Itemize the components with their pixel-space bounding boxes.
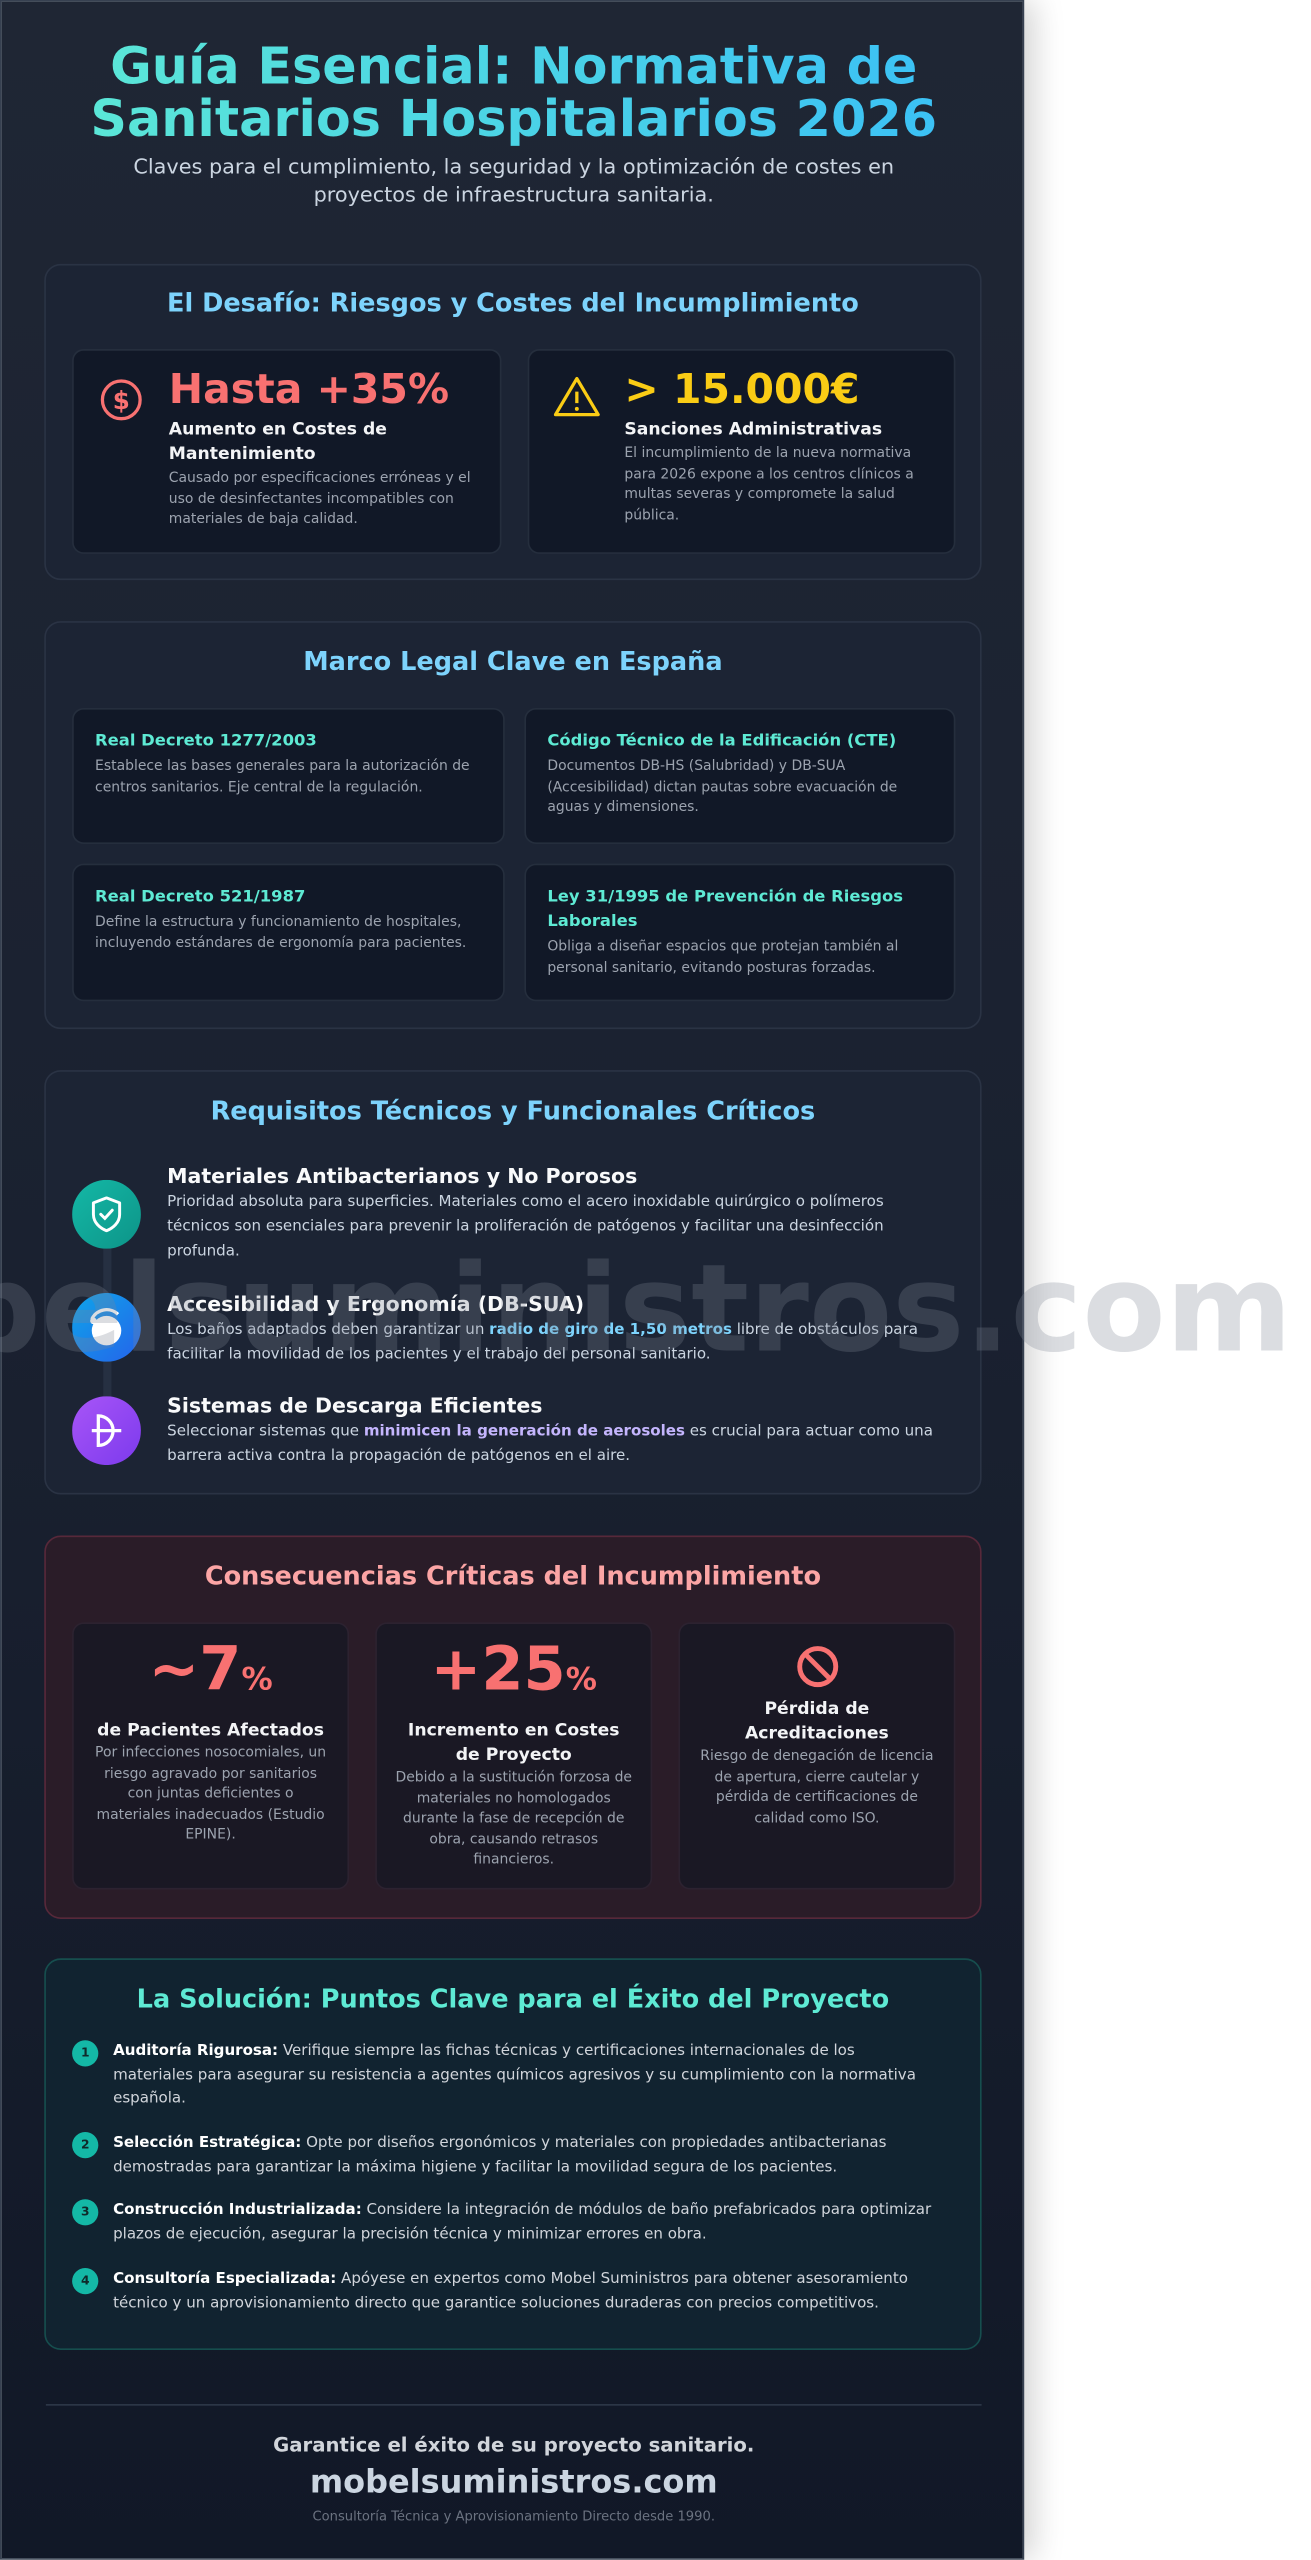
- card: Ley 31/1995: Obliga a diseñar espacios que protejan también al personal sanitario, evitando posturas forzadas.: [547, 939, 898, 976]
- card: costes proyecto: Debido a la sustitución forzosa de materiales no homologados durante la fase de recepción de obra, causando retrasos financieros.: [396, 1770, 632, 1868]
- item 1: materiales para asegurar su resistencia a agentes químicos agresivos y su cumplimiento con la normativa española.: [113, 2066, 916, 2107]
- item: descarga: Sistemas de Descarga Eficientes: [167, 1393, 542, 1418]
- panel: solución: [44, 1958, 982, 2350]
- card: sanciones: [528, 349, 955, 554]
- card: CTE: Código Técnico de la Edificación (CTE): [547, 733, 896, 751]
- card: costes proyecto: [375, 1622, 652, 1889]
- card: pacientes: de Pacientes Afectados: [97, 1721, 324, 1740]
- footer: mobelsuministros.com: [310, 2463, 718, 2501]
- stat: hasta 35: [168, 365, 471, 528]
- stat: sanciones: Sanciones Administrativas: [624, 420, 882, 439]
- footer: Consultoría Técnica y Aprovisionamiento Directo desde 1990.: [312, 2509, 715, 2524]
- card: CTE: [524, 708, 955, 844]
- card: RD 521: Define la estructura y funcionamiento de hospitales, incluyendo estándares de ergonomía para pacientes.: [95, 914, 466, 951]
- item: materiales: Prioridad absoluta para superficies. Materiales como el acero inoxidable quirúrgico o polímeros técnicos son esenciales para prevenir la proliferación de patógenos y facilitar una desinfección profunda.: [167, 1193, 884, 1260]
- icon: money: [100, 379, 142, 420]
- card: RD 521: [72, 864, 505, 1001]
- main container: [0, 0, 1024, 2560]
- icon: accessibility: [72, 1293, 141, 1362]
- panel: solución: 4: [81, 2273, 89, 2288]
- item 2: demostradas para garantizar la máxima higiene y facilitar la movilidad segura de los pacientes.: [113, 2157, 837, 2175]
- item 3: plazos de ejecución, asegurar la precisión técnica y minimizar errores en obra.: [113, 2225, 707, 2243]
- item: descarga: [72, 1393, 933, 1465]
- card: acreditaciones: Riesgo de denegación de licencia de apertura, cierre cautelar y pérdida de certificaciones de calidad como ISO.: [700, 1749, 934, 1826]
- item 2: Selección Estratégica: Opte por diseños ergonómicos y materiales con propiedades antibacterianas: [113, 2134, 887, 2152]
- card: pacientes: Por infecciones nosocomiales, un riesgo agravado por sanitarios con juntas deficientes o materiales inadecuados (Estudio EPINE).: [95, 1745, 326, 1844]
- stat: hasta 35: Aumento en Costes de Mantenimiento: [169, 420, 387, 464]
- item 3: [72, 2199, 932, 2243]
- item 4: [72, 2268, 908, 2311]
- icon: prohibited: [797, 1646, 838, 1688]
- icon: flush: [72, 1396, 141, 1465]
- card: pacientes: [72, 1622, 349, 1889]
- item: materiales: Materiales Antibacterianos y No Porosos: [167, 1164, 637, 1188]
- icon: money: $: [113, 386, 130, 415]
- icon: shield: [72, 1180, 141, 1249]
- card: RD 1277: Real Decreto 1277/2003: [95, 733, 317, 751]
- item 3: Construcción Industrializada: Considere la integración de módulos de baño prefabricados para optimizar: [113, 2201, 931, 2219]
- stat: sanciones: > 15.000€: [624, 365, 860, 413]
- item: descarga: Seleccionar sistemas que minimicen la generación de aerosoles es crucial para actuar como una barrera activa contra la propagación de patógenos en el aire.: [167, 1422, 933, 1465]
- stat: sanciones: El incumplimiento de la nueva normativa para 2026 expone a los centros clínicos a multas severas y compromete la salud pública.: [624, 446, 914, 524]
- card: costes proyecto: +25%: [431, 1634, 597, 1704]
- heading: consecuencias: Consecuencias Críticas del Incumplimiento: [205, 1562, 821, 1591]
- card: costes mantenimiento: [72, 349, 501, 554]
- footer: Garantice el éxito de su proyecto sanitario.: [273, 2434, 754, 2456]
- title: Guía Esencial: Normativa de: [110, 38, 917, 97]
- stat: sanciones: [624, 365, 914, 524]
- connector line: [103, 1236, 111, 1416]
- card: acreditaciones: Pérdida de Acreditaciones: [745, 1699, 889, 1744]
- item 4: Consultoría Especializada: Apóyese en expertos como Mobel Suministros para obtener asesoramiento: [113, 2270, 908, 2288]
- title: [2, 41, 1026, 146]
- item: accesibilidad: Accesibilidad y Ergonomía (DB-SUA): [167, 1291, 584, 1316]
- footer: [273, 2434, 754, 2524]
- card: Ley 31/1995: [524, 864, 955, 1001]
- icon: warning: [554, 376, 600, 416]
- panel: consecuencias: [44, 1536, 982, 1919]
- heading: marco legal: Marco Legal Clave en España: [303, 647, 723, 677]
- card: Ley 31/1995: Ley 31/1995 de Prevención de Riesgos Laborales: [547, 888, 903, 931]
- stat: hasta 35: Causado por especificaciones erróneas y el uso de desinfectantes incompatibles con materiales de baja calidad.: [169, 470, 471, 528]
- card: costes proyecto: Incremento en Costes de Proyecto: [408, 1721, 620, 1765]
- card: pacientes: ~7%: [148, 1634, 273, 1704]
- list: puntos clave: [72, 2040, 932, 2311]
- item: materiales: [72, 1164, 884, 1260]
- item: accesibilidad: Los baños adaptados deben garantizar un radio de giro de 1,50 metros libre de obstáculos para facilitar la movilidad de los pacientes y el trabajo del personal sanitario.: [167, 1321, 918, 1363]
- subtitle: Claves para el cumplimiento, la seguridad y la optimización de costes en proyectos de infraestructura sanitaria.: [133, 154, 894, 206]
- card: CTE: Documentos DB-HS (Salubridad) y DB-SUA (Accesibilidad) dictan pautas sobre evacuación de aguas y dimensiones.: [547, 759, 897, 816]
- heading: requisitos: Requisitos Técnicos y Funcionales Críticos: [211, 1096, 815, 1126]
- heading: solución: La Solución: Puntos Clave para el Éxito del Proyecto: [137, 1985, 889, 2014]
- panel: marco legal: [44, 621, 982, 1029]
- card: acreditaciones: [678, 1622, 955, 1889]
- item 1: Auditoría Rigurosa: Verifique siempre las fichas técnicas y certificaciones internacionales de los: [113, 2042, 855, 2060]
- panel: el desafío: [44, 264, 982, 580]
- panel: solución: 2: [81, 2137, 89, 2152]
- heading: desafío: El Desafío: Riesgos y Costes del Incumplimiento: [167, 288, 859, 318]
- card: RD 1277: Establece las bases generales para la autorización de centros sanitarios. Eje central de la regulación.: [95, 759, 470, 796]
- item 4: técnico y un aprovisionamiento directo que garantice soluciones duraderas con precios competitivos.: [113, 2293, 879, 2311]
- stat: hasta 35: Hasta +35%: [169, 365, 449, 413]
- card: RD 521: Real Decreto 521/1987: [95, 888, 305, 906]
- card: RD 1277: [72, 708, 505, 844]
- item 1: [72, 2040, 916, 2107]
- item 2: [72, 2132, 887, 2175]
- panel: solución: 1: [81, 2045, 89, 2060]
- item: accesibilidad: [72, 1291, 918, 1363]
- panel: requisitos: [44, 1070, 982, 1495]
- title: Sanitarios Hospitalarios 2026: [90, 90, 937, 149]
- panel: solución: 3: [81, 2204, 89, 2219]
